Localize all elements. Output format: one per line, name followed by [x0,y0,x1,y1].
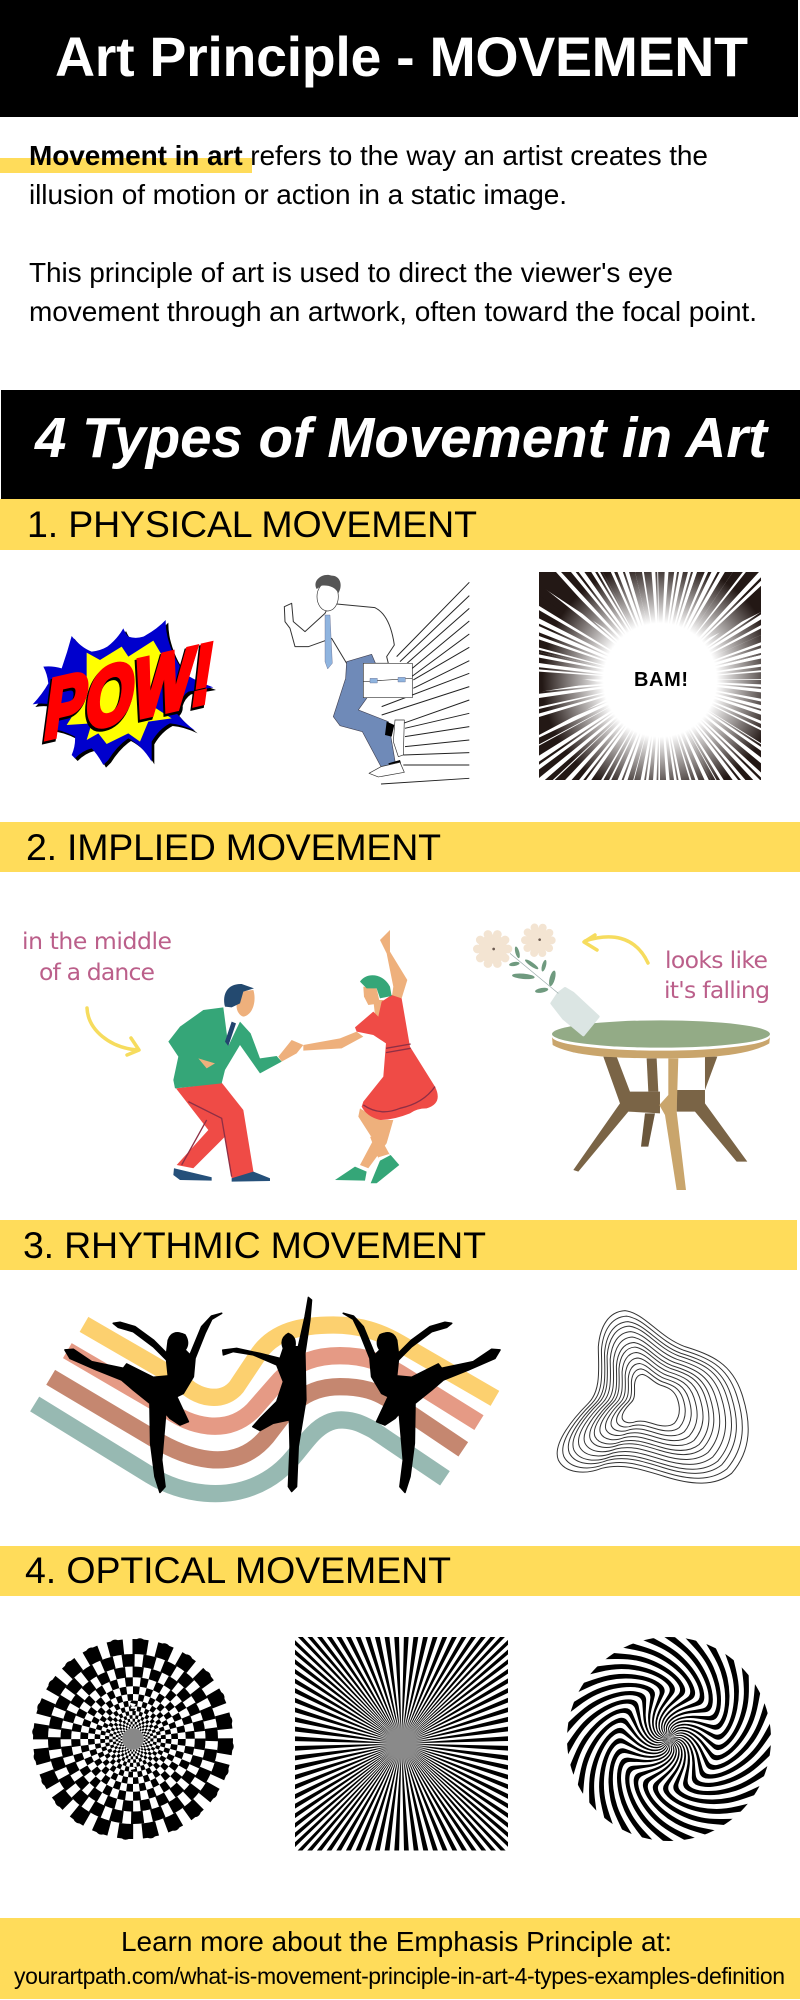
section 1 heading: 1. PHYSICAL MOVEMENT [27,503,477,545]
footer url: yourartpath.com/what-is-movement-principle-in-art-4-types-examples-definition [14,1963,785,1989]
illustration: dancing couple [168,930,438,1183]
section 1 heading [0,499,800,550]
illustration: optical checker circle [38,1644,228,1834]
footer headline: Learn more about the Emphasis Principle at: [121,1926,672,1957]
intro text block [0,140,757,327]
subtitle banner [1,390,800,499]
caption: looks like it's falling: it's falling [664,976,770,1004]
caption: in the middle of a dance: in the middle [22,927,172,955]
intro text block: movement through an artwork, often toward the focal point. [29,296,757,327]
briefcase [363,663,412,698]
section 4 heading: 4. OPTICAL MOVEMENT [25,1549,451,1591]
wavy stripes [35,1324,495,1494]
section 4 heading [0,1546,800,1596]
illustration: falling vase on table [477,927,770,1190]
illustration: optical sunburst rectangle [294,1636,508,1851]
ballerina right [343,1313,500,1492]
illustration: POW comic burst: POW! [39,626,219,759]
ballerina center [223,1297,312,1492]
intro text block: illusion of motion or action in a static image. [29,179,567,210]
speed lines [381,582,469,784]
subtitle text: 4 Types of Movement in Art [34,406,769,469]
highlight under bold term [0,158,252,173]
illustration: concentric contour lines [557,1311,748,1483]
intro text block: Movement in art refers to the way an artist creates the [29,140,708,171]
section 3 heading [0,1220,797,1270]
illustration: ballerinas over wavy stripes [35,1297,500,1494]
section 2 heading: 2. IMPLIED MOVEMENT [26,826,441,868]
caption: in the middle of a dance [22,927,172,986]
table legs [573,1057,747,1190]
section 2 heading [0,822,800,872]
vase [552,988,598,1035]
title text: Art Principle - MOVEMENT [55,26,748,88]
illustration: BAM speed burst [539,572,761,780]
title banner [0,0,798,117]
footer banner [0,1918,800,1999]
BAM text: BAM! [634,669,688,691]
table top [552,1020,770,1058]
illustration: running businessman with speed lines [284,575,469,784]
illustration: optical spiral circle [567,1637,771,1841]
male dancer [168,984,303,1182]
flowers [477,927,552,964]
flower stems and leaves [509,946,558,994]
illustration: POW comic burst: POW! [38,628,218,761]
ballerina left [65,1313,222,1492]
caption: in the middle of a dance: of a dance [39,958,155,986]
caption: looks like it's falling: looks like [665,946,768,974]
caption: looks like it's falling [664,946,770,1004]
intro text block: This principle of art is used to direct the viewer's eye [29,257,673,288]
arrow: toward dancers [87,1008,139,1055]
female dancer [303,930,438,1183]
section 3 heading: 3. RHYTHMIC MOVEMENT [23,1224,486,1266]
arrow: toward flowers [584,935,648,963]
